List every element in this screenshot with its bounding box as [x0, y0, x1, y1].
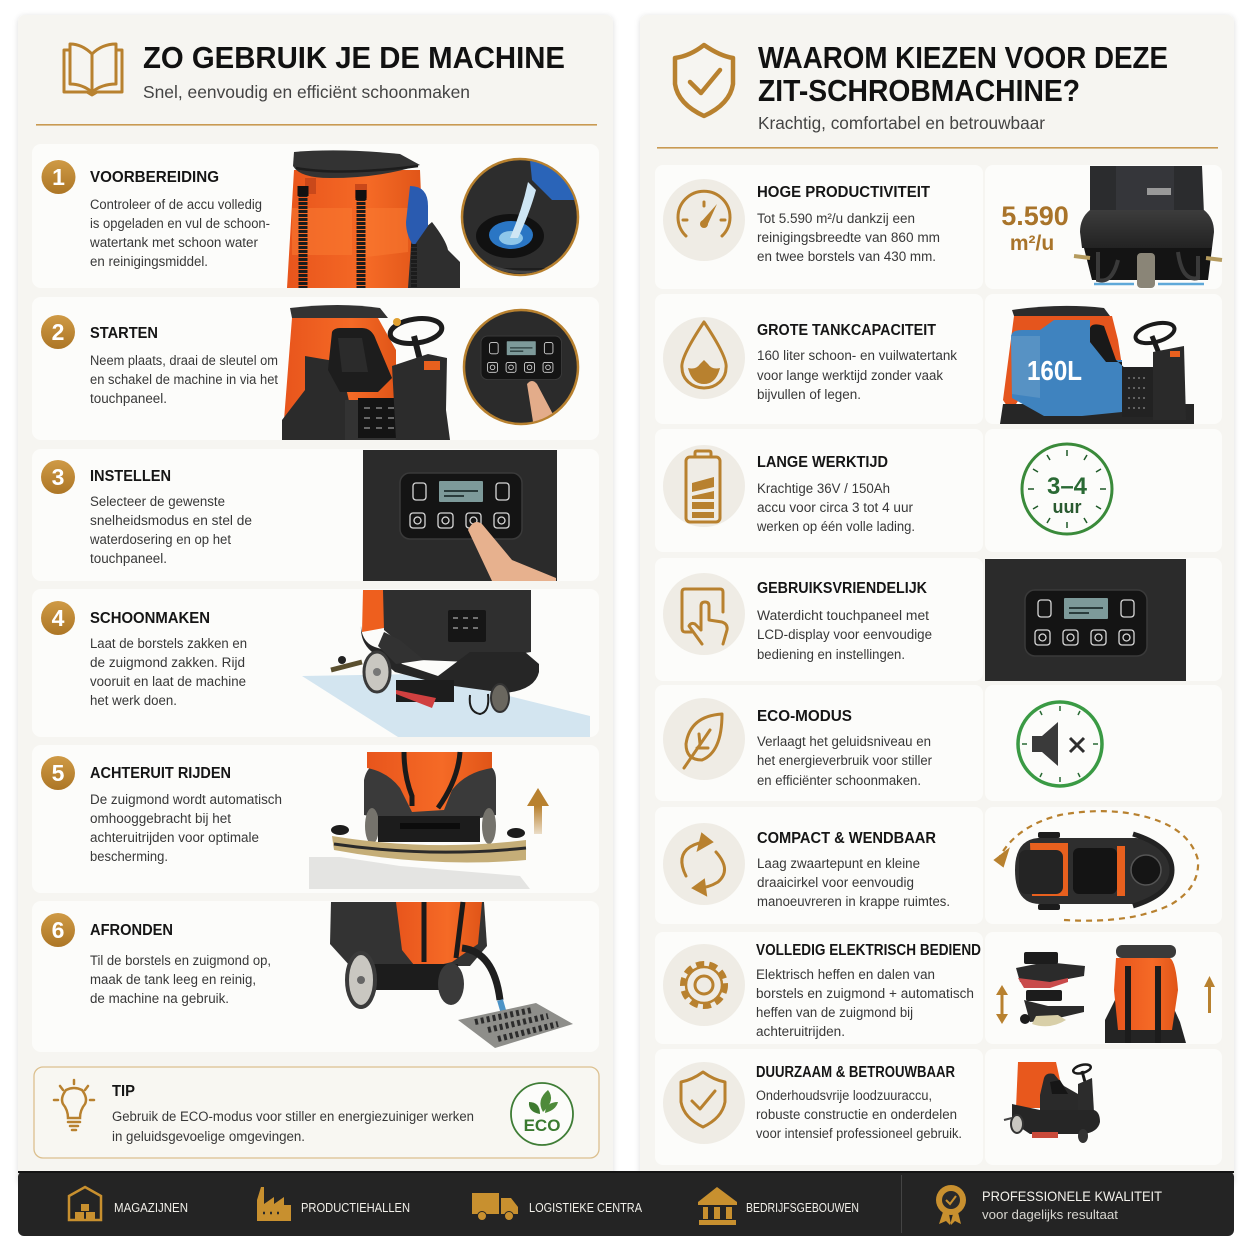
number badge 6 — [41, 913, 75, 947]
icon: leaf — [663, 698, 745, 780]
floor reflection — [309, 857, 530, 889]
number badge 4: 4 — [52, 605, 65, 631]
detail circle: touch panel — [464, 310, 578, 428]
step text: omhooggebracht bij het — [90, 811, 231, 826]
subtitle: Krachtig, comfortabel en betrouwbaar — [758, 113, 1045, 133]
step text: is opgeladen en vul de schoon- — [90, 216, 270, 231]
feature text: Krachtige 36V / 150Ah — [757, 481, 890, 496]
feature text: voor lange werktijd zonder vaak — [757, 368, 943, 383]
eco badge — [511, 1083, 573, 1145]
professionele kwaliteit: voor dagelijks resultaat — [982, 1207, 1118, 1222]
bedrijfsgebouwen — [698, 1187, 859, 1225]
step 3: instellen — [32, 449, 599, 581]
step text: bescherming. — [90, 849, 168, 864]
feature text: het energieverbruik voor stiller — [757, 753, 932, 768]
feature text: en twee borstels van 430 mm. — [757, 249, 936, 264]
feature text — [756, 1088, 962, 1141]
feature text: Waterdicht touchpaneel met — [757, 608, 929, 623]
icon: open book — [64, 44, 122, 95]
step text: De zuigmond wordt automatisch — [90, 792, 282, 807]
number badge 3 — [41, 460, 75, 494]
step title: AFRONDEN — [90, 922, 173, 939]
feature text: Verlaagt het geluidsniveau en — [757, 734, 931, 749]
arrow up — [527, 788, 549, 834]
step text: Selecteer de gewenste — [90, 494, 225, 509]
number badge 1: 1 — [52, 164, 65, 190]
touch panel photo — [363, 450, 557, 581]
feature text: borstels en zuigmond + automatisch — [756, 986, 974, 1001]
step text: touchpaneel. — [90, 391, 167, 406]
icon: gear — [663, 944, 745, 1026]
number badge 3: 3 — [52, 464, 64, 490]
machine with blue tank: 160L — [1027, 355, 1082, 386]
feature text: manoeuvreren in krappe ruimtes. — [757, 894, 950, 909]
brush heads with arrows — [996, 952, 1085, 1026]
bedrijfsgebouwen: BEDRIJFSGEBOUWEN — [746, 1201, 859, 1215]
icon: gauge — [663, 179, 745, 261]
feature title: COMPACT & WENDBAAR — [757, 830, 936, 847]
tip heading: TIP — [112, 1083, 135, 1100]
tip text: Gebruik de ECO-modus voor stiller en energiezuiniger werken — [112, 1109, 474, 1124]
feature text: accu voor circa 3 tot 4 uur — [757, 500, 914, 515]
feature text: achteruitrijden. — [756, 1024, 845, 1039]
step text — [90, 953, 271, 1006]
number badge 2: 2 — [52, 319, 64, 345]
feature text: LCD-display voor eenvoudige — [757, 627, 932, 642]
feature: volledig elektrisch bediend — [655, 932, 1222, 1044]
feature text — [757, 211, 940, 264]
footer bar — [18, 1171, 1234, 1236]
feature text — [757, 348, 957, 402]
clock: 3-4 uur: uur — [1052, 497, 1082, 517]
detail circle: filling tank — [462, 156, 580, 280]
step text — [90, 353, 278, 406]
icon: shield check — [663, 1062, 745, 1144]
step text: Neem plaats, draai de sleutel om — [90, 353, 278, 368]
machine rear with lift arrow — [1105, 945, 1215, 1043]
feature text: Elektrisch heffen en dalen van — [756, 967, 935, 982]
feature: lange werktijd — [655, 429, 1222, 552]
step 5: achteruit rijden — [32, 745, 599, 893]
step 2: starten — [32, 297, 599, 440]
productiehallen: PRODUCTIEHALLEN — [301, 1201, 410, 1215]
step text: het werk doen. — [90, 693, 177, 708]
title: ZO GEBRUIK JE DE MACHINE — [143, 40, 565, 75]
machine draining — [330, 902, 573, 1048]
machine top view with turn path — [995, 811, 1198, 921]
step text: maak de tank leeg en reinig, — [90, 972, 256, 987]
step text: touchpaneel. — [90, 551, 167, 566]
number badge 5 — [41, 756, 75, 790]
step text: waterdosering en op het — [89, 532, 231, 547]
stat: 5.590 m2/u: m²/u — [1010, 232, 1054, 255]
clock: 3-4 uur: 3–4 — [1047, 473, 1088, 500]
stat: 5.590 m2/u: 5.590 — [1001, 201, 1069, 231]
step text: Til de borstels en zuigmond op, — [90, 953, 271, 968]
feature title: GEBRUIKSVRIENDELIJK — [757, 580, 927, 597]
feature text: 160 liter schoon- en vuilwatertank — [757, 348, 957, 363]
step 4: schoonmaken — [32, 589, 599, 737]
machine rear with tank — [287, 150, 460, 288]
icon: light bulb — [54, 1080, 94, 1130]
feature text: werken op één volle lading. — [756, 519, 915, 534]
machine with blue tank — [1000, 306, 1194, 424]
feature text — [756, 481, 915, 534]
title: WAAROM KIEZEN VOOR DEZE — [758, 40, 1168, 75]
icon: touch panel — [663, 573, 745, 655]
step text — [90, 636, 247, 708]
feature text: draaicirkel voor eenvoudig — [757, 875, 914, 890]
feature text: bediening en instellingen. — [757, 647, 905, 662]
touch panel photo — [985, 559, 1186, 681]
step text: snelheidsmodus en stel de — [90, 513, 252, 528]
feature text: heffen van de zuigmond bij — [756, 1005, 913, 1020]
feature title: ECO-MODUS — [757, 708, 852, 725]
step 1: voorbereiding — [32, 144, 599, 288]
title — [758, 40, 1168, 108]
feature: eco-modus — [655, 685, 1222, 801]
magazijnen: MAGAZIJNEN — [114, 1201, 188, 1215]
step title: STARTEN — [90, 325, 158, 342]
step text: de machine na gebruik. — [90, 991, 229, 1006]
number badge 5: 5 — [52, 760, 65, 786]
panel: waarom kiezen — [640, 15, 1234, 1185]
panel: zo gebruik je de machine — [18, 15, 613, 1185]
feature: grote tankcapaciteit — [655, 294, 1222, 424]
feature text: voor intensief professioneel gebruik. — [756, 1126, 962, 1141]
feature text — [757, 608, 932, 662]
step 6: afronden — [32, 901, 599, 1052]
number badge 4 — [41, 601, 75, 635]
feature text — [757, 734, 932, 788]
step text: Laat de borstels zakken en — [90, 636, 247, 651]
feature title: LANGE WERKTIJD — [757, 454, 888, 471]
tip box — [34, 1067, 599, 1158]
feature: duurzaam en betrouwbaar — [655, 1049, 1222, 1165]
feature text — [756, 967, 974, 1039]
feature text: reinigingsbreedte van 860 mm — [757, 230, 940, 245]
machine rear view — [1074, 166, 1222, 288]
machine small — [1004, 1062, 1100, 1143]
feature text: Onderhoudsvrije loodzuuraccu, — [756, 1088, 932, 1103]
feature title: DUURZAAM & BETROUWBAAR — [756, 1064, 955, 1081]
title: ZIT-SCHROBMACHINE? — [758, 73, 1080, 108]
step text — [89, 197, 270, 269]
step title: INSTELLEN — [90, 468, 171, 485]
step text: en reinigingsmiddel. — [90, 254, 208, 269]
step title: ACHTERUIT RIJDEN — [90, 765, 231, 782]
eco badge: ECO — [524, 1116, 560, 1135]
step text: en schakel de machine in via het — [90, 372, 278, 387]
step text: achteruitrijden voor optimale — [90, 830, 259, 845]
professionele kwaliteit: PROFESSIONELE KWALITEIT — [982, 1188, 1162, 1204]
machine on wet floor — [302, 590, 590, 737]
icon: battery — [663, 445, 745, 527]
number badge 1 — [42, 160, 76, 194]
professionele kwaliteit — [936, 1185, 1162, 1225]
feature: hoge productiviteit — [655, 165, 1222, 289]
number badge 6: 6 — [52, 917, 64, 943]
feature text: Laag zwaartepunt en kleine — [757, 856, 920, 871]
step text: watertank met schoon water — [89, 235, 258, 250]
magazijnen — [69, 1187, 188, 1220]
logistieke centra — [472, 1193, 643, 1220]
subtitle: Snel, eenvoudig en efficiënt schoonmaken — [143, 82, 470, 102]
feature text: Tot 5.590 m²/u dankzij een — [757, 211, 915, 226]
feature text: robuste constructie en onderdelen — [756, 1107, 957, 1122]
step text — [89, 494, 252, 566]
icon: silent clock — [1018, 702, 1102, 786]
feature: compact en wendbaar — [655, 807, 1222, 924]
number badge 2 — [41, 315, 75, 349]
icon: rotate arrows — [663, 823, 745, 905]
icon: shield check — [675, 45, 733, 116]
step title: SCHOONMAKEN — [90, 610, 210, 627]
feature title: GROTE TANKCAPACITEIT — [757, 322, 936, 339]
feature text: bijvullen of legen. — [757, 387, 861, 402]
feature: gebruiksvriendelijk — [655, 558, 1222, 681]
feature title: HOGE PRODUCTIVITEIT — [757, 184, 930, 201]
feature title: VOLLEDIG ELEKTRISCH BEDIEND — [756, 942, 981, 959]
step text — [90, 792, 282, 864]
icon: water drop — [663, 317, 745, 399]
step text: Controleer of de accu volledig — [90, 197, 262, 212]
step title: VOORBEREIDING — [90, 169, 219, 186]
stat: 5.590 m2/u — [1001, 201, 1069, 255]
tip text — [112, 1109, 474, 1144]
tip text: in geluidsgevoelige omgevingen. — [112, 1129, 305, 1144]
feature text: en efficiënter schoonmaken. — [757, 773, 921, 788]
step text: de zuigmond zakken. Rijd — [90, 655, 245, 670]
step text: vooruit en laat de machine — [90, 674, 246, 689]
feature text — [757, 856, 950, 909]
logistieke centra: LOGISTIEKE CENTRA — [529, 1201, 643, 1215]
squeegee rear view — [331, 752, 526, 862]
clock: 3-4 uur — [1022, 444, 1112, 534]
machine side view — [282, 305, 450, 440]
productiehallen — [257, 1187, 410, 1221]
